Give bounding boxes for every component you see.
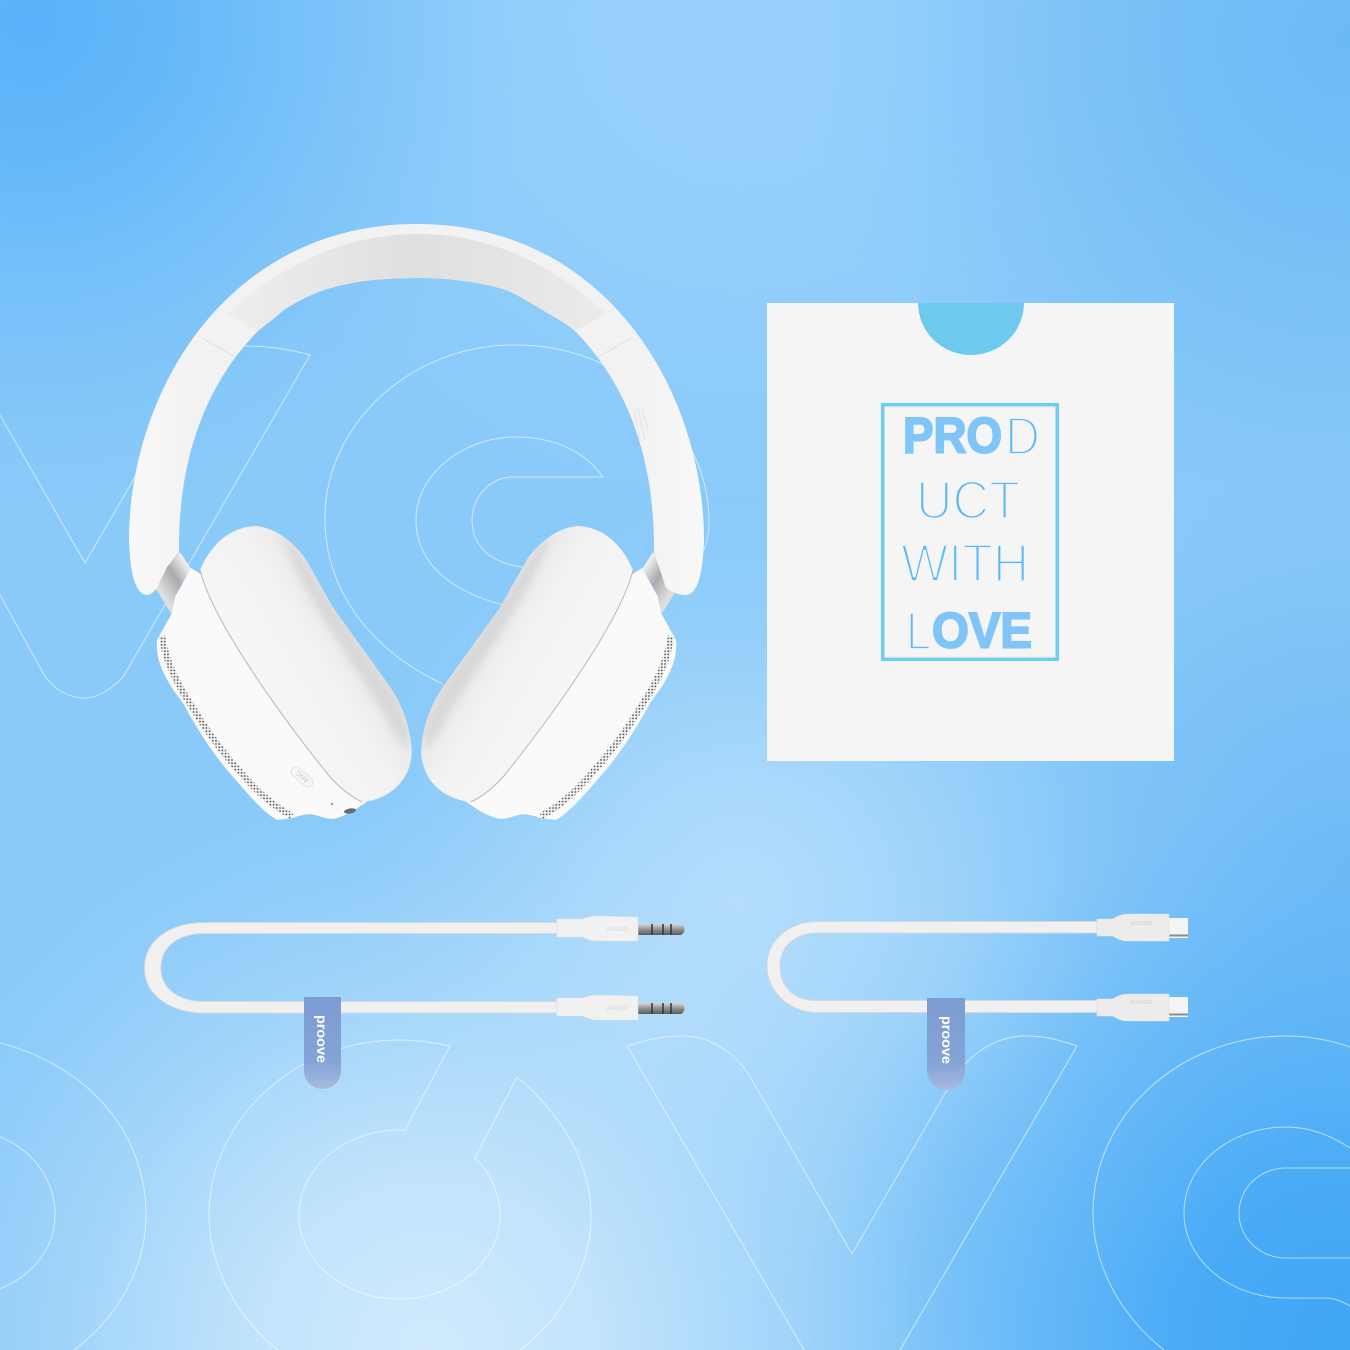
left ear cup bbox=[157, 526, 412, 820]
lower USB-C connector: proove bbox=[1130, 998, 1152, 1005]
ANC button bbox=[289, 765, 315, 789]
slogan text: D bbox=[1005, 406, 1040, 466]
speaker mesh bbox=[162, 636, 292, 816]
cushion inner shading bbox=[282, 536, 409, 750]
USB-C cable bbox=[767, 914, 1188, 1090]
slogan frame bbox=[883, 405, 1057, 659]
upper jack connector: proove bbox=[606, 925, 628, 932]
upper USB-C connector: proove bbox=[1130, 919, 1152, 926]
cable tie bbox=[304, 997, 341, 1089]
headphones bbox=[129, 224, 704, 820]
upper USB-C connector bbox=[1097, 914, 1188, 941]
cable tie: proove bbox=[939, 1016, 955, 1064]
ANC button: ANC bbox=[295, 769, 311, 784]
audio cable bbox=[144, 916, 684, 1089]
cushion inner shading bbox=[424, 536, 551, 750]
cable tie bbox=[927, 998, 965, 1090]
right ear cup bbox=[421, 526, 676, 820]
slogan text: WITH bbox=[901, 534, 1029, 594]
right headband label bbox=[634, 408, 648, 440]
slogan text: PRO bbox=[903, 408, 1002, 464]
lower jack connector: proove bbox=[606, 1004, 628, 1011]
cushion seam bbox=[200, 570, 362, 802]
audio jack bbox=[344, 807, 356, 815]
slogan text: L bbox=[906, 602, 931, 662]
cable loop bbox=[767, 922, 1097, 1012]
headband bbox=[129, 224, 704, 595]
lower jack connector bbox=[557, 995, 684, 1020]
card sheet bbox=[767, 303, 1174, 761]
headband cushion pad bbox=[227, 234, 606, 331]
shell bbox=[461, 568, 676, 820]
right hinge bbox=[642, 552, 677, 615]
shell bbox=[157, 568, 372, 820]
slogan text: OVE bbox=[932, 602, 1032, 658]
cushion bbox=[421, 526, 633, 802]
indicator dot bbox=[331, 803, 333, 805]
hang tab cutout bbox=[918, 303, 1024, 355]
cushion bbox=[200, 526, 412, 802]
watermark: proove outline lettering bbox=[0, 345, 1350, 1350]
cushion seam bbox=[471, 570, 633, 802]
lower USB-C connector bbox=[1097, 994, 1188, 1021]
headband seams bbox=[202, 338, 631, 357]
left hinge bbox=[156, 552, 191, 615]
slogan text bbox=[901, 406, 1040, 662]
upper jack connector bbox=[557, 916, 684, 941]
cable loop bbox=[144, 922, 557, 1013]
product card bbox=[767, 303, 1174, 761]
slogan text: UCT bbox=[916, 470, 1020, 530]
speaker mesh bbox=[541, 636, 671, 816]
cable tie: proove bbox=[314, 1015, 330, 1063]
